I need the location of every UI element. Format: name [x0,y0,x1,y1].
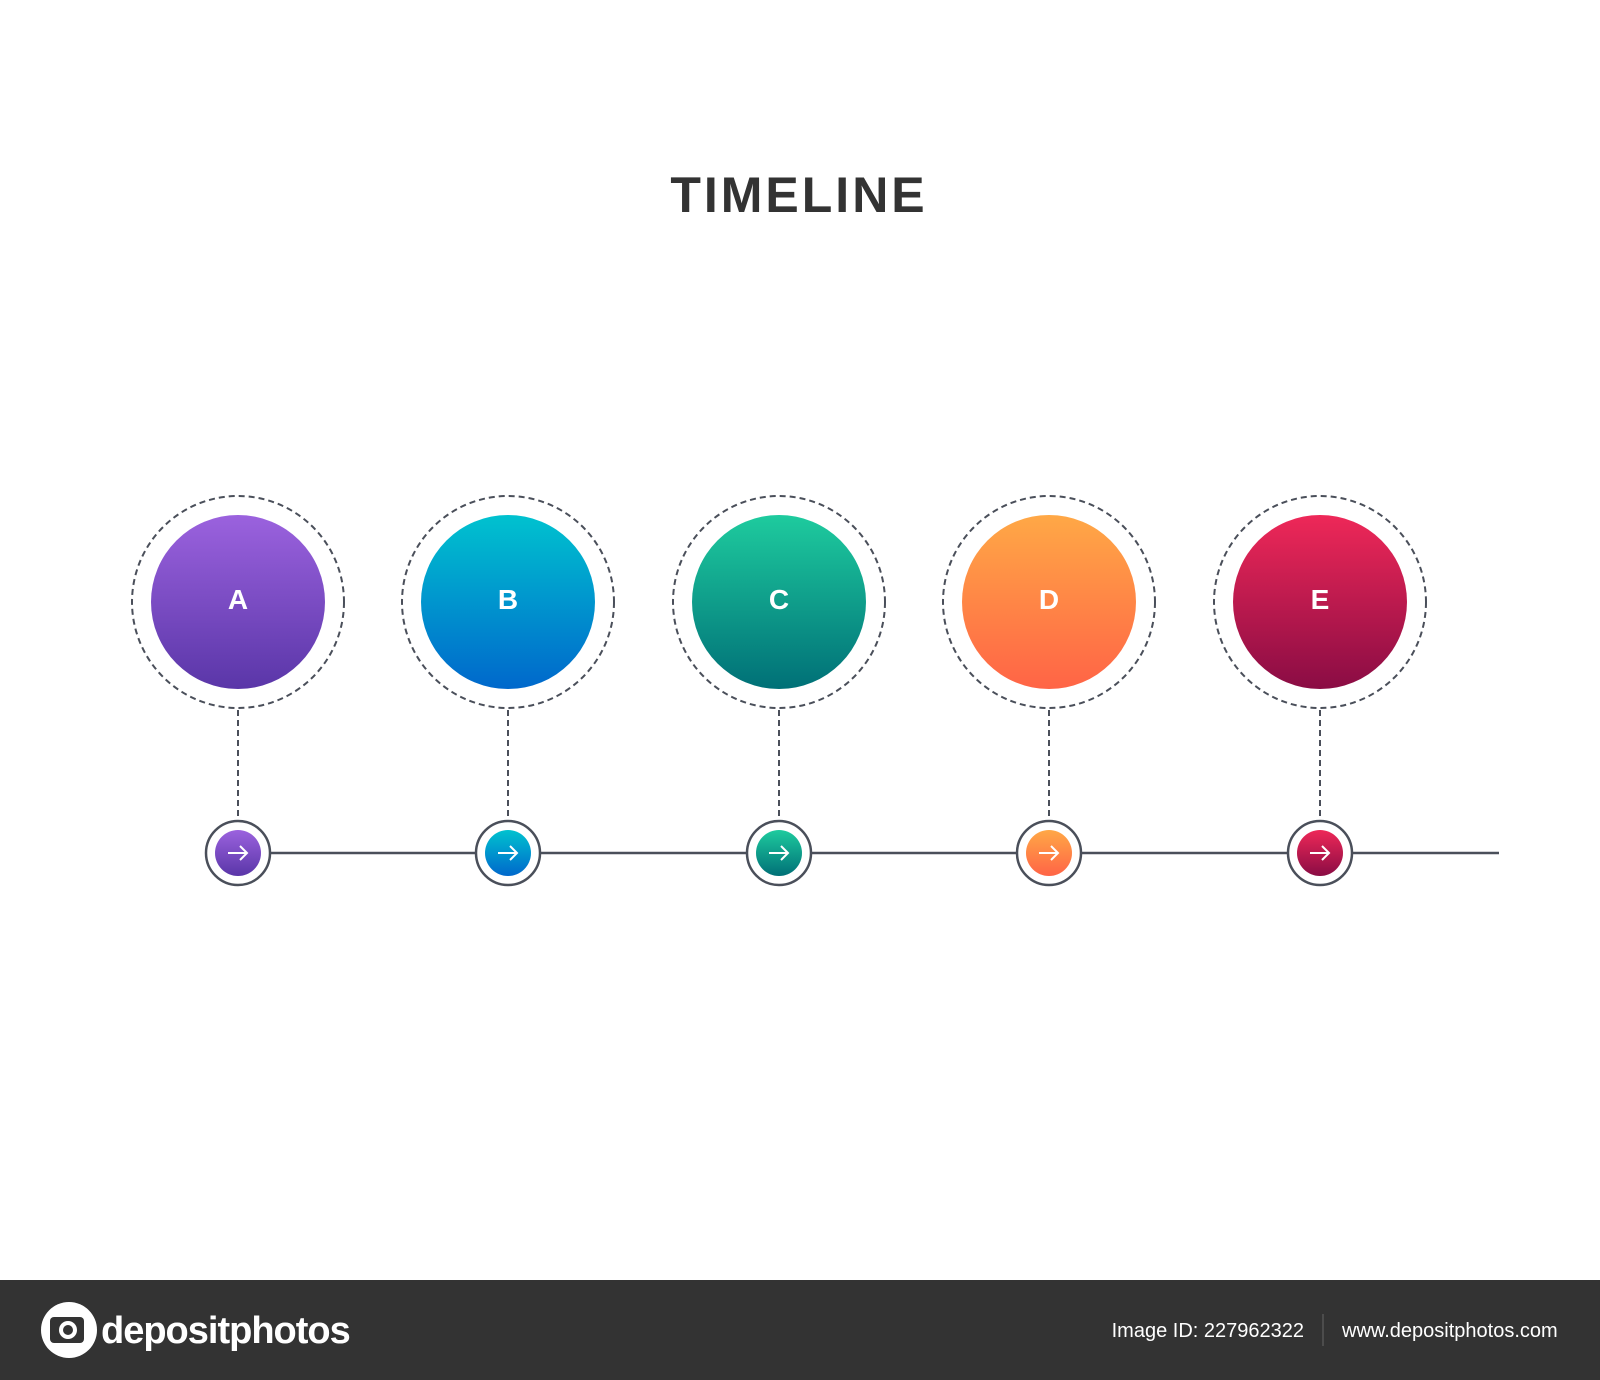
step A: A [228,584,248,615]
footer bar: depositphotos [101,1310,350,1352]
footer bar [0,1280,1600,1380]
footer bar: www.depositphotos.com [1341,1320,1558,1342]
step C: C [769,584,789,615]
title: TIMELINE [670,167,928,223]
step B [402,496,614,885]
step B: B [498,584,518,615]
step D: D [1039,584,1059,615]
step E: E [1311,584,1329,615]
footer bar: Image ID: 227962322 [1112,1320,1304,1342]
step D [943,496,1155,885]
step A [132,496,344,885]
step E [1214,496,1426,885]
step C [673,496,885,885]
timeline axis line [271,852,1499,854]
icon: camera logo [41,1302,97,1358]
